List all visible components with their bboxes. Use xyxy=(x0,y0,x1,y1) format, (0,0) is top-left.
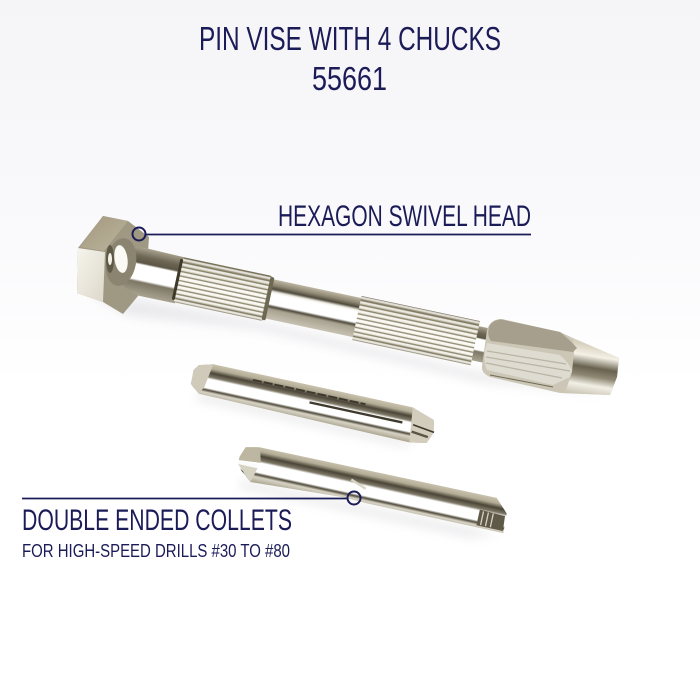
title: 55661 xyxy=(312,60,387,97)
title xyxy=(199,20,501,97)
callout: double ended collets xyxy=(22,492,360,561)
neck, knurled grips and shaft xyxy=(112,243,492,369)
callout: hexagon swivel head xyxy=(132,200,531,240)
callout: hexagon swivel head: HEXAGON SWIVEL HEAD xyxy=(278,200,531,233)
product shadows xyxy=(90,296,610,538)
neck ball xyxy=(102,236,140,288)
shaft xyxy=(262,279,364,338)
upper collet xyxy=(188,360,438,447)
chuck nut xyxy=(482,319,619,395)
lower collet xyxy=(235,443,510,537)
hexagon head xyxy=(77,216,149,314)
rear knurled grip xyxy=(171,257,275,322)
pin vise tool xyxy=(77,216,619,395)
collar ring xyxy=(472,326,491,363)
neck flare xyxy=(112,243,185,303)
title: PIN VISE WITH 4 CHUCKS xyxy=(199,20,501,57)
callout: double ended collets: FOR HIGH-SPEED DRILLS #30 TO #80 xyxy=(22,541,290,561)
front knurled grip xyxy=(352,296,480,365)
callout: double ended collets: DOUBLE ENDED COLLETS xyxy=(22,504,292,537)
